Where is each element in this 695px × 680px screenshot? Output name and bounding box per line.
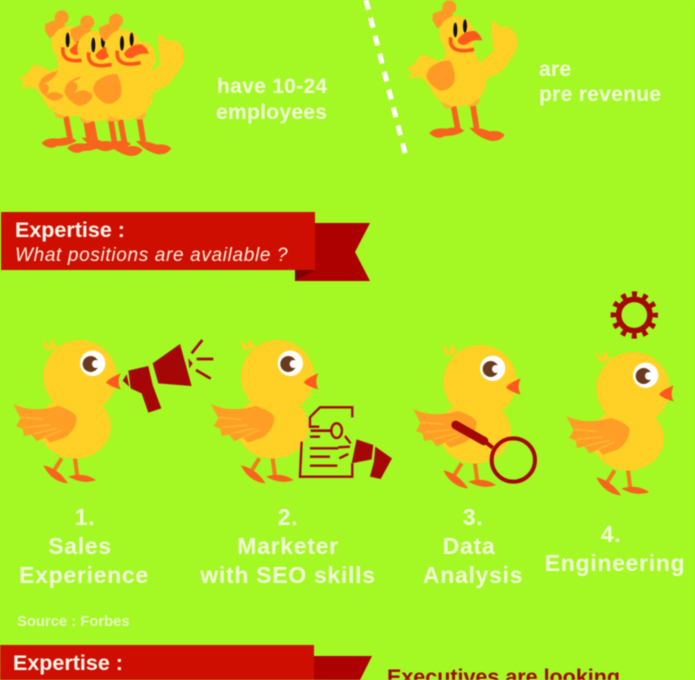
label: data analysis [423,504,523,588]
icon: megaphone [123,340,213,413]
label: data analysis: Analysis [423,562,523,588]
expertise banner: positions: What positions are available ? [15,245,288,266]
stat: are pre revenue [539,58,661,106]
label: sales experience: Experience [19,562,149,588]
single hen [406,0,518,141]
chick 4: engineering [566,350,674,495]
dashed divider [366,0,406,157]
label: engineering: Engineering [545,550,685,576]
icon: gear [613,294,655,336]
label: sales experience: 1. [75,504,95,530]
stat: are pre revenue: pre revenue [539,83,661,106]
label: marketer with SEO skills: Marketer [237,533,339,559]
label: marketer with SEO skills [199,504,376,588]
chick 1: sales [13,338,213,483]
stat: are pre revenue: are [539,58,571,81]
label: sales experience [19,504,149,588]
expertise banner: positions [1,212,370,281]
chick 3: data analysis [413,343,521,488]
icon: document, key and megaphone [300,407,392,479]
expertise banner: bottom: Expertise : [13,651,123,675]
label: sales experience: Sales [48,533,112,559]
expertise banner: positions: Expertise : [15,218,125,242]
stat: have 10-24 employees [216,75,327,124]
label: engineering [545,521,685,576]
label: marketer with SEO skills: with SEO skills [199,562,376,588]
label: data analysis: 3. [463,504,483,530]
label: data analysis: Data [443,533,495,559]
source note: Source : Forbes [17,614,130,630]
chick 2: marketer [211,338,392,483]
group of three hens [18,10,184,156]
stat: have 10-24 employees: employees [216,101,327,124]
expertise banner: bottom [0,645,372,680]
icon: magnifying glass [456,425,535,482]
label: engineering: 4. [601,521,621,547]
label: marketer with SEO skills: 2. [278,504,298,530]
stat: have 10-24 employees: have 10-24 [217,75,327,98]
